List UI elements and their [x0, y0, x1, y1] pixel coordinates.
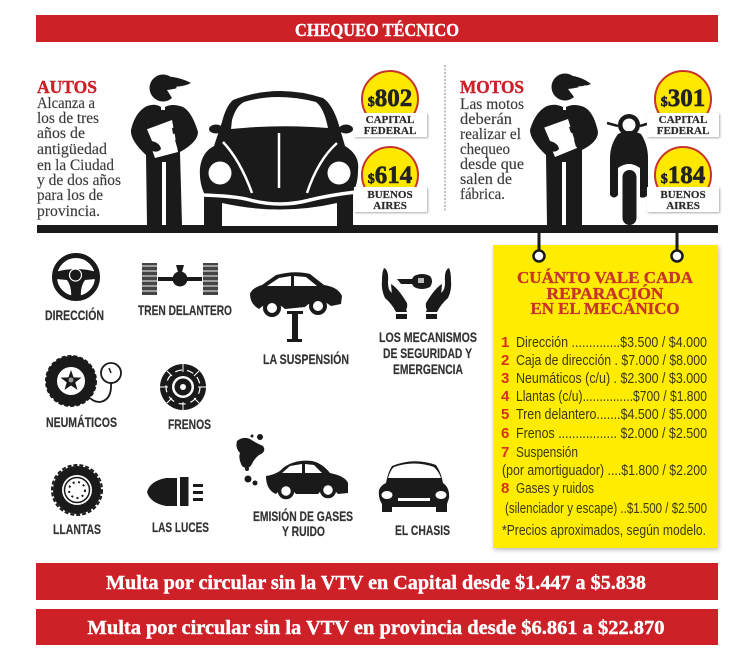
motos text	[460, 96, 524, 203]
badge: autos capital federal: FEDERAL	[364, 125, 416, 137]
icon: neumáticos	[46, 356, 121, 406]
motos text: chequeo	[460, 141, 510, 158]
badge: motos buenos aires	[647, 147, 719, 212]
badge: autos capital federal: $802	[368, 85, 412, 112]
panel: motos	[460, 71, 719, 225]
badge: motos capital federal: FEDERAL	[657, 125, 709, 137]
banner: multa provincia: Multa por circular sin la VTV en provincia desde $6.861 a $22.870	[88, 617, 664, 639]
autos text: los de tres	[37, 110, 99, 127]
price list	[501, 334, 707, 539]
motos text: fábrica.	[460, 186, 505, 203]
badge: autos buenos aires: BUENOS	[367, 189, 413, 201]
autos text: años de	[37, 125, 85, 142]
badge: autos buenos aires: AIRES	[373, 200, 407, 212]
badge: motos buenos aires: AIRES	[666, 200, 700, 212]
icon: car front	[200, 91, 358, 226]
label: neumáticos: NEUMÁTICOS	[46, 414, 117, 430]
price list: Frenos ................. $2.000 / $2.500	[516, 425, 707, 442]
panel: autos	[37, 71, 427, 226]
motos text: desde que	[460, 156, 524, 173]
label: mecanismos de seguridad: DE SEGURIDAD Y	[383, 345, 472, 361]
title banner	[36, 15, 718, 42]
price list: 3	[501, 370, 509, 387]
price list: Neumáticos (c/u) . $2.300 / $3.000	[516, 370, 707, 387]
price list: 2	[501, 352, 509, 369]
label: emisión de gases	[253, 507, 353, 539]
badge: autos buenos aires	[354, 147, 427, 212]
autos text: para los de	[37, 187, 103, 204]
autos heading: AUTOS	[37, 77, 97, 97]
icon: inspector	[530, 74, 598, 225]
badge: motos capital federal	[647, 71, 719, 137]
label: frenos: FRENOS	[168, 416, 211, 432]
label: mecanismos de seguridad: LOS MECANISMOS	[379, 329, 477, 345]
motos text: Las motos	[460, 96, 524, 113]
icon: motorcycle	[607, 114, 650, 225]
motos heading: MOTOS	[460, 77, 524, 97]
price list: 1	[501, 334, 509, 351]
badge: autos capital federal	[354, 71, 427, 137]
label: mecanismos de seguridad	[379, 329, 477, 377]
banner: multa capital	[36, 563, 718, 600]
label: emisión de gases: Y RUIDO	[282, 523, 325, 539]
icon: dirección	[54, 256, 98, 298]
label: la suspensión: LA SUSPENSIÓN	[263, 350, 349, 367]
badge: autos buenos aires: $614	[368, 162, 413, 189]
label: las luces: LAS LUCES	[152, 519, 209, 535]
badge: autos capital federal: CAPITAL	[366, 114, 414, 126]
autos text: provincia.	[37, 203, 100, 220]
motos text: deberán	[460, 111, 512, 128]
autos text: en la Ciudad	[37, 157, 114, 174]
price list: 4	[501, 388, 510, 405]
hanger rings	[534, 233, 682, 262]
price list: Suspensión	[516, 444, 578, 461]
label: el chasis: EL CHASIS	[395, 522, 450, 538]
icon: el chasis	[379, 461, 449, 512]
motos text: salen de	[460, 171, 512, 188]
panel: componentes	[45, 256, 477, 539]
price list: Dirección ..............$3.500 / $4.000	[516, 334, 707, 351]
title banner: CHEQUEO TÉCNICO	[295, 19, 459, 40]
label: mecanismos de seguridad: EMERGENCIA	[393, 361, 463, 377]
price heading: EN EL MECÁNICO	[530, 299, 680, 318]
icon: frenos	[160, 364, 206, 410]
label: dirección: DIRECCIÓN	[45, 306, 104, 323]
price list: 5	[501, 406, 509, 423]
autos text: Alcanza a	[37, 95, 95, 112]
price list: (por amortiguador) ....$1.800 / $2.200	[502, 462, 707, 479]
icon: llantas	[52, 465, 102, 515]
icon: las luces	[147, 477, 203, 506]
label: tren delantero: TREN DELANTERO	[138, 302, 232, 318]
price heading	[517, 268, 694, 318]
badge: motos capital federal: CAPITAL	[659, 114, 707, 126]
banner: multa capital: Multa por circular sin la VTV en Capital desde $1.447 a $5.838	[106, 572, 646, 594]
divider	[444, 65, 446, 212]
icon: manos y llave	[382, 268, 451, 319]
price list: Caja de dirección . $7.000 / $8.000	[516, 352, 707, 369]
autos text: antigüedad	[37, 141, 107, 158]
label: emisión de gases: EMISIÓN DE GASES	[253, 507, 353, 524]
icon: la suspensión	[250, 272, 342, 342]
banner: multa provincia	[36, 609, 718, 645]
price heading: REPARACIÓN	[546, 284, 664, 303]
price list: 7	[501, 444, 509, 461]
price list: 6	[501, 425, 509, 442]
price list: Tren delantero.......$4.500 / $5.000	[516, 406, 707, 423]
motos text: realizar el	[460, 126, 522, 143]
badge: motos buenos aires: $184	[661, 162, 706, 189]
price list: Gases y ruidos	[516, 480, 594, 497]
autos text: y de dos años	[37, 172, 121, 189]
badge: motos capital federal: $301	[661, 85, 705, 112]
icon: inspector	[131, 74, 198, 225]
badge: motos buenos aires: BUENOS	[660, 189, 706, 201]
icon: emisión de gases	[236, 434, 348, 498]
price list: 8	[501, 480, 509, 497]
price heading: CUÁNTO VALE CADA	[517, 268, 694, 287]
ground bar	[37, 225, 718, 233]
label: llantas: LLANTAS	[53, 521, 101, 537]
icon: tren delantero	[142, 263, 218, 295]
panel: precios de reparación	[493, 233, 718, 548]
autos text	[37, 95, 121, 220]
